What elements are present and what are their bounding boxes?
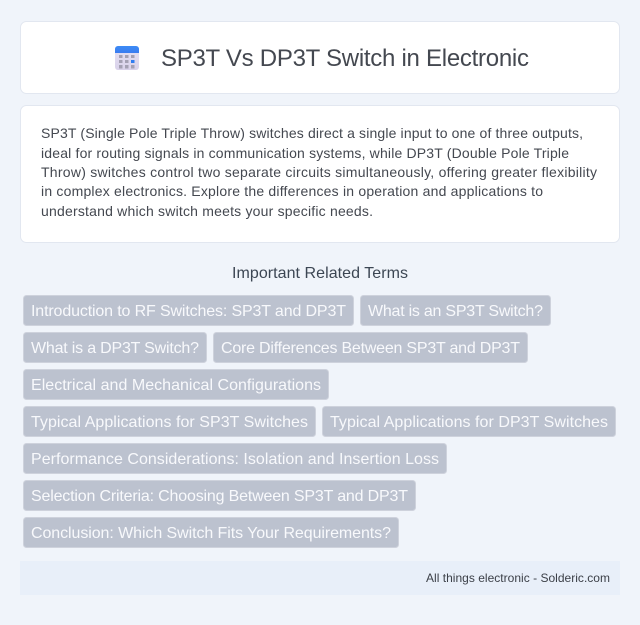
tag: DP3T applications: Typical Applications for DP3T Switches — [330, 414, 608, 431]
tag: introduction — [24, 296, 354, 326]
footer credit: All things electronic - Solderic.com — [426, 571, 610, 585]
tag group: related terms — [24, 296, 616, 548]
tag: configurations: Electrical and Mechanical Configurations — [31, 377, 321, 394]
icon: calendar grid — [115, 46, 139, 70]
footer — [20, 561, 620, 595]
tag: selection criteria — [24, 480, 416, 510]
heading: important related terms: Important Related Terms — [232, 265, 408, 282]
tag: what is SP3T: What is an SP3T Switch? — [368, 303, 543, 320]
tag: performance: Performance Considerations: Isolation and Insertion Loss — [31, 451, 439, 468]
tag: configurations — [24, 370, 328, 400]
tag: conclusion — [24, 518, 398, 548]
tag: core differences — [214, 332, 528, 362]
tag: DP3T applications — [322, 406, 616, 436]
title: SP3T Vs DP3T Switch in Electronic — [161, 45, 529, 72]
tag: performance — [24, 444, 446, 474]
tag: introduction: Introduction to RF Switches: SP3T and DP3T — [31, 303, 346, 320]
description text: Throw) switches control two separate circuits simultaneously, offering greater flexibility — [41, 164, 597, 180]
tag: selection criteria: Selection Criteria: Choosing Between SP3T and DP3T — [31, 488, 408, 505]
description text: understand which switch meets your specific needs. — [41, 203, 373, 219]
description text: in complex electronics. Explore the differences in operation and applications to — [41, 183, 543, 199]
tag: what is SP3T — [360, 296, 550, 326]
panel: description — [20, 106, 620, 242]
tag: what is DP3T: What is a DP3T Switch? — [31, 340, 199, 357]
panel: title card — [20, 22, 620, 94]
tag: SP3T applications: Typical Applications for SP3T Switches — [31, 414, 308, 431]
tag: conclusion: Conclusion: Which Switch Fits Your Requirements? — [31, 525, 391, 542]
tag: what is DP3T — [24, 332, 206, 362]
description text: SP3T (Single Pole Triple Throw) switches direct a single input to one of three outputs, — [41, 125, 583, 141]
tag: SP3T applications — [24, 406, 316, 436]
description text: ideal for routing signals in communication systems, while DP3T (Double Pole Triple — [41, 145, 569, 161]
tag: core differences: Core Differences Between SP3T and DP3T — [221, 340, 520, 357]
